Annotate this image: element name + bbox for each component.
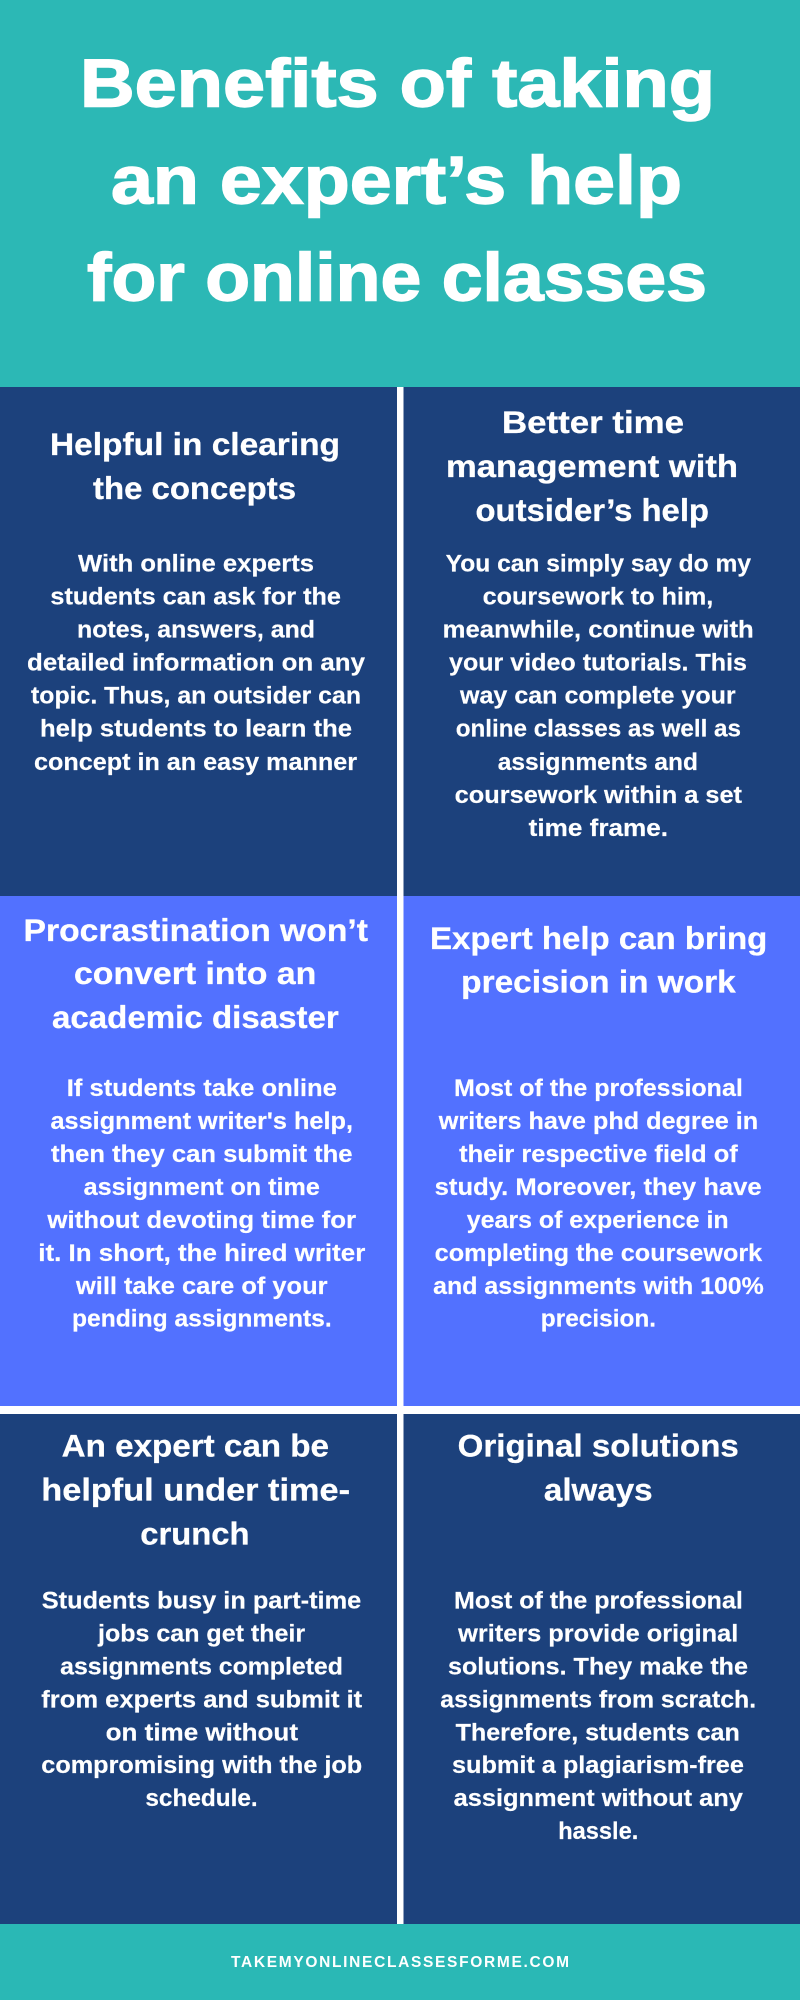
panel: helpful in clearing the concepts — [0, 387, 397, 896]
body text: clearing concepts: students can ask for the — [50, 584, 341, 611]
panel: precision in work — [404, 896, 800, 1406]
body text: original solutions: assignments from scratch. — [440, 1686, 756, 1713]
body text: original solutions — [440, 1588, 756, 1845]
body text: helpful under time-crunch — [41, 1588, 362, 1812]
heading: better time management — [446, 404, 738, 528]
heading: precision in work: precision in work — [461, 964, 736, 1000]
body text: clearing concepts: concept in an easy manner — [34, 749, 357, 776]
heading: helpful under time-crunch: crunch — [140, 1516, 250, 1552]
body text: clearing concepts: help students to learn the — [40, 716, 352, 743]
body text: better time management — [443, 551, 754, 842]
body text: procrastination: If students take online — [67, 1075, 337, 1102]
body text: precision in work: writers have phd degree in — [438, 1108, 758, 1135]
heading: procrastination: convert into an — [74, 955, 316, 991]
heading: helpful under time-crunch: helpful under time- — [41, 1472, 350, 1508]
body text: clearing concepts: detailed information on any — [27, 650, 365, 677]
heading: better time management: Better time — [502, 404, 684, 440]
body text: better time management: time frame. — [529, 815, 668, 842]
body text: helpful under time-crunch: from experts and submit it — [41, 1686, 362, 1713]
title — [80, 46, 715, 316]
body text: precision in work: completing the coursework — [435, 1240, 763, 1267]
body text: precision in work: precision. — [541, 1306, 656, 1332]
footer band with website — [0, 1924, 800, 2000]
body text: precision in work: and assignments with 100% — [433, 1273, 764, 1300]
heading: precision in work — [430, 920, 767, 1000]
body text: better time management: online classes as well as — [456, 716, 741, 743]
body text: original solutions: assignment without any — [454, 1785, 743, 1812]
body text: procrastination: it. In short, the hired writer — [38, 1240, 366, 1267]
header band with title — [0, 0, 800, 387]
body text: original solutions: solutions. They make the — [448, 1654, 748, 1680]
panel: helpful under time-crunch — [0, 1414, 397, 1924]
footer website text: TAKEMYONLINECLASSESFORME.COM — [231, 1954, 569, 1971]
heading: original solutions: always — [544, 1472, 653, 1508]
title: for online classes — [87, 240, 707, 316]
body text: better time management: coursework within a set — [455, 782, 742, 809]
body text: procrastination: without devoting time for — [46, 1207, 357, 1234]
body text: precision in work: Most of the professional — [454, 1075, 743, 1102]
body text: procrastination: pending assignments. — [72, 1306, 332, 1332]
body text: precision in work — [433, 1075, 764, 1332]
body text: better time management: You can simply say do my — [446, 551, 751, 578]
panel: procrastination — [0, 896, 397, 1406]
heading: original solutions: Original solutions — [458, 1428, 739, 1464]
heading: precision in work: Expert help can bring — [430, 920, 767, 956]
heading: better time management: outsider’s help — [476, 492, 709, 528]
heading: helpful under time-crunch — [41, 1428, 350, 1552]
title: Benefits of taking — [80, 46, 715, 122]
title: an expert’s help — [111, 143, 682, 219]
body text: procrastination: then they can submit the — [51, 1141, 352, 1168]
body text: better time management: way can complete your — [459, 683, 736, 710]
body text: clearing concepts — [27, 551, 365, 776]
body text: clearing concepts: notes, answers, and — [77, 617, 315, 644]
body text: original solutions: Therefore, students can — [456, 1719, 740, 1746]
body text: precision in work: study. Moreover, they have — [435, 1174, 762, 1201]
heading: original solutions — [458, 1428, 739, 1508]
heading: better time management: management with — [446, 448, 738, 484]
body text: helpful under time-crunch: assignments completed — [60, 1654, 343, 1680]
body text: helpful under time-crunch: on time without — [106, 1719, 298, 1746]
body text: precision in work: years of experience in — [467, 1207, 729, 1234]
heading: helpful in clearing the concepts: Helpful in clearing — [50, 426, 340, 462]
body text: original solutions: submit a plagiarism-free — [452, 1752, 744, 1779]
body text: helpful under time-crunch: jobs can get their — [97, 1620, 306, 1648]
body text: procrastination: assignment writer's help, — [50, 1108, 353, 1135]
body text: procrastination: assignment on time — [84, 1174, 320, 1201]
body text: better time management: meanwhile, continue with — [443, 617, 754, 644]
body text: procrastination — [38, 1075, 366, 1332]
heading: procrastination: Procrastination won’t — [24, 912, 369, 948]
heading: helpful in clearing the concepts: the concepts — [93, 470, 296, 506]
body text: better time management: assignments and — [498, 749, 698, 776]
body text: original solutions: hassle. — [558, 1818, 638, 1845]
body text: helpful under time-crunch: compromising with the job — [41, 1752, 362, 1779]
body text: procrastination: will take care of your — [75, 1273, 328, 1300]
panel: better time management — [404, 387, 800, 896]
body text: original solutions: Most of the professional — [454, 1588, 743, 1615]
heading: procrastination: academic disaster — [52, 999, 339, 1035]
heading: helpful under time-crunch: An expert can be — [62, 1428, 329, 1464]
body text: helpful under time-crunch: Students busy in part-time — [42, 1588, 361, 1615]
body text: helpful under time-crunch: schedule. — [145, 1785, 258, 1812]
body text: better time management: your video tutorials. This — [449, 650, 747, 677]
body text: clearing concepts: topic. Thus, an outsider can — [31, 683, 361, 710]
panel: original solutions — [404, 1414, 800, 1924]
body text: precision in work: their respective field of — [459, 1141, 739, 1168]
heading: helpful in clearing the concepts — [50, 426, 340, 506]
heading: procrastination — [24, 912, 369, 1035]
body text: clearing concepts: With online experts — [78, 551, 314, 578]
body text: better time management: coursework to him, — [483, 584, 713, 611]
body text: original solutions: writers provide original — [457, 1620, 738, 1648]
